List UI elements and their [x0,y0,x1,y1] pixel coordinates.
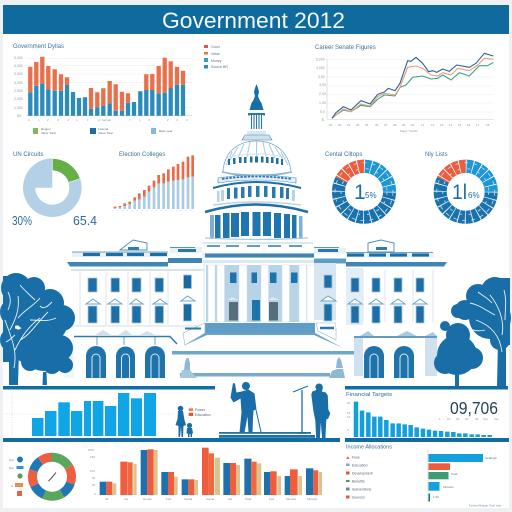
panel: line chart top right: 17 [476,123,480,127]
panel: financial targets chart: 20 [347,401,351,405]
chart legend right: Source BR [211,65,228,69]
panel: stacked bar chart top left: 2,000 [14,97,23,101]
panel: segmented donut 1 [325,152,393,221]
panel: line chart top right: 1,00 [319,101,326,105]
panel: line chart top right: 16 [467,123,471,127]
chart legend right: Value [211,52,220,56]
panel: stacked bar chart top left: yr. factual [98,118,111,122]
panel: line chart top right: Major Trends [400,129,418,133]
bottom grouped bar chart: 150 [90,455,95,459]
panel: segmented donut 1: 1 [354,181,366,204]
panel: stacked bar chart top left [13,44,228,135]
bottom grouped bar chart: Fed [269,497,275,501]
panel: line chart top right [315,45,494,133]
bottom grouped bar chart: Fed [166,497,172,501]
bottom grouped bar chart: Municip [286,497,297,501]
panel: stacked bar chart top left: 3 [176,118,178,122]
panel: stacked bar chart top left: 2 [47,118,49,122]
chart legend bottom: Value Total [98,131,113,135]
bottom ring chart [9,456,72,496]
statue on top [250,84,264,110]
panel: financial targets chart: Top [483,417,488,421]
ring legend icons: C [11,484,14,488]
bottom grouped bar chart: 100 [90,469,95,473]
panel: line chart top right: 04 [356,123,360,127]
panel: financial targets chart: 30 [465,417,469,421]
panel: stacked bar chart top left: 3,500 [14,72,23,76]
panel: stacked bar chart top left: 2 [167,118,169,122]
panel: financial targets chart: 10 [447,417,451,421]
panel: income allocations [346,444,501,508]
drum lower colonnade [205,204,308,241]
panel: line chart top right: 13 [440,123,444,127]
header banner [3,5,509,34]
chart legend right: Good [211,45,220,49]
small legend: Power [195,408,206,412]
allocation list: Fees [352,456,360,460]
panel: stacked bar chart top left: 2,500 [14,89,23,93]
panel: stacked bar chart top left: $0 [17,114,21,118]
panel: pie donut left [12,152,97,228]
allocation list: Benefits [352,480,365,484]
ground bars [3,386,509,442]
people: woman and child [176,406,193,437]
bottom left bar chart [4,392,175,436]
small legend: Education [195,413,211,417]
dome base frieze [207,245,302,247]
big number: 09,706 [450,398,498,418]
bottom grouped bar chart [88,448,322,501]
allocation bars: Strategic [485,456,497,460]
allocation list: Sources [352,496,365,500]
chart legend bottom: Region [41,127,51,131]
ring legend icons: Set [9,466,14,470]
panel: stacked bar chart top left: 3,000 [14,81,23,85]
panel: stacked bar chart top left: 1,000 [14,106,23,110]
panel: financial targets chart: 20 [456,417,460,421]
panel: stacked bar chart top left: 7 [129,118,131,122]
panel: financial targets chart [346,392,499,437]
panel: line chart top right: 02 [338,123,342,127]
right trees [434,277,511,386]
allocation bars: Total [451,472,458,476]
panel: line chart top right: 14 [449,123,453,127]
allocation list: Development [352,472,373,476]
bottom grouped bar chart: Social [184,497,193,501]
panel: line chart top right: Career Senate Figures [315,45,376,51]
panel: line chart top right: 5,000 [316,58,325,62]
panel: stacked bar chart top left: A [28,118,30,122]
statues [180,357,345,378]
panel: line chart top right: 5,0 [320,110,325,114]
capitol dome [170,84,339,248]
bottom grouped bar chart: Municip [307,497,318,501]
chart legend right [204,45,228,69]
central portico [172,253,354,376]
panel: financial targets chart: Tax [494,417,499,421]
panel: line chart top right: 07 [384,123,388,127]
panel: line chart top right: 01 [329,123,333,127]
panel: financial targets chart: 15 [347,411,351,415]
ring legend icons [9,456,24,496]
panel: segmented donut 2: Nly Lists [425,152,448,158]
panel: pie donut left: UN Circuits [13,152,43,158]
bottom grouped bar chart: 50 [92,476,96,480]
chart legend bottom: Base year [159,129,173,133]
bottom grouped bar chart: Vis [124,497,129,501]
panel: stacked bar chart top left: 1 [38,118,40,122]
bottom grouped bar chart: 0 [94,492,96,496]
panel: stacked bar chart top left: 5,000 [14,56,23,60]
panel: line chart top right: $ [322,118,324,122]
panel: stacked bar chart top left: 1 [87,118,89,122]
panel: line chart top right: 11 [421,123,424,127]
allocation list: Education [352,464,368,468]
allocation bars: Finance [443,485,454,489]
standing figure [311,384,330,440]
chart legend bottom [33,127,173,135]
chart legend right: Money [211,59,222,63]
panel: stacked bar chart top left: 4 [67,118,69,122]
panel: line chart top right: 05 [365,123,369,127]
panel: financial targets chart: 10 [347,415,351,419]
bottom grouped bar chart: Total [245,497,252,501]
title: Government 2012 [162,8,345,33]
pie values: 65.4 [73,213,97,228]
panel: line chart top right: 3,00 [319,83,326,87]
bottom grouped bar chart: Social [206,497,215,501]
panel: line chart top right: 06 [375,123,379,127]
lantern [242,113,272,140]
panel: line chart top right: 12 [431,123,435,127]
small legend [189,408,211,417]
panel: segmented donut 1: 5% [365,191,377,200]
pie values [12,213,97,228]
panel: line chart top right: 15 [458,123,462,127]
panel: financial targets chart: 1 [439,417,441,421]
panel: stacked growth chart: Election Colleges [119,152,165,158]
panel: line chart top right: 10 [411,123,415,127]
drum upper [218,175,296,183]
panel: stacked bar chart top left: 1 [139,118,141,122]
panel: income allocations: Federal Budget Total Year [469,504,501,508]
left trees [0,273,75,385]
panel: line chart top right: 03 [347,123,351,127]
right wing [314,240,447,378]
panel: stacked bar chart top left: Government Dyllas [13,44,64,50]
panel: line chart top right: 09 [402,123,406,127]
panel: line chart top right: 08 [393,123,397,127]
panel: segmented donut 2: 6% [468,191,480,200]
panel: financial targets chart: 40 [475,417,479,421]
panel: stacked growth chart [113,152,194,210]
ring legend icons: Top [9,458,14,462]
pie values: 30% [12,213,32,228]
chart legend bottom: Federal [98,127,109,131]
panel: stacked bar chart top left: 4,000 [14,64,23,68]
panel: line chart top right: 4,000 [316,66,325,70]
panel: line chart top right: 2,00 [319,92,326,96]
panel: segmented donut 1: Cental Ciltops [325,152,362,158]
green wedge [52,158,80,182]
panel: financial targets chart: Financial Targets [346,392,392,398]
panel: stacked bar chart top left: 2 [186,118,188,122]
panel: line chart top right: 3,50 [318,75,325,79]
panel: stacked bar chart top left: 1 [76,118,78,122]
microphone stand [293,386,308,433]
allocation bars [428,449,497,502]
bottom grouped bar chart: 50 [92,483,96,487]
podium steps [219,432,315,438]
allocation bars: 1,00 [433,495,439,499]
chart legend bottom: Value Total [41,131,56,135]
cane [256,410,261,432]
panel: line chart top right: 18 [486,123,490,127]
allocation list: Subventions [352,488,372,492]
bottom grouped bar chart: House [143,497,152,501]
capitol building [64,240,447,378]
allocation list [346,456,373,500]
speaker silhouette [230,382,256,432]
left wing [64,240,205,378]
panel: segmented donut 2 [425,152,495,221]
panel: income allocations: Income Allocations [346,444,393,450]
dome cap [223,141,291,175]
panel: stacked bar chart top left: 3 [148,118,150,122]
bottom grouped bar chart: 50% [88,448,94,452]
panel: stacked bar chart top left: 3 [57,118,59,122]
bottom grouped bar chart: Act [228,497,233,501]
panel: financial targets chart: 5 [347,428,349,432]
panel: segmented donut 2: 1l [452,181,467,204]
bottom grouped bar chart: All [105,497,109,501]
